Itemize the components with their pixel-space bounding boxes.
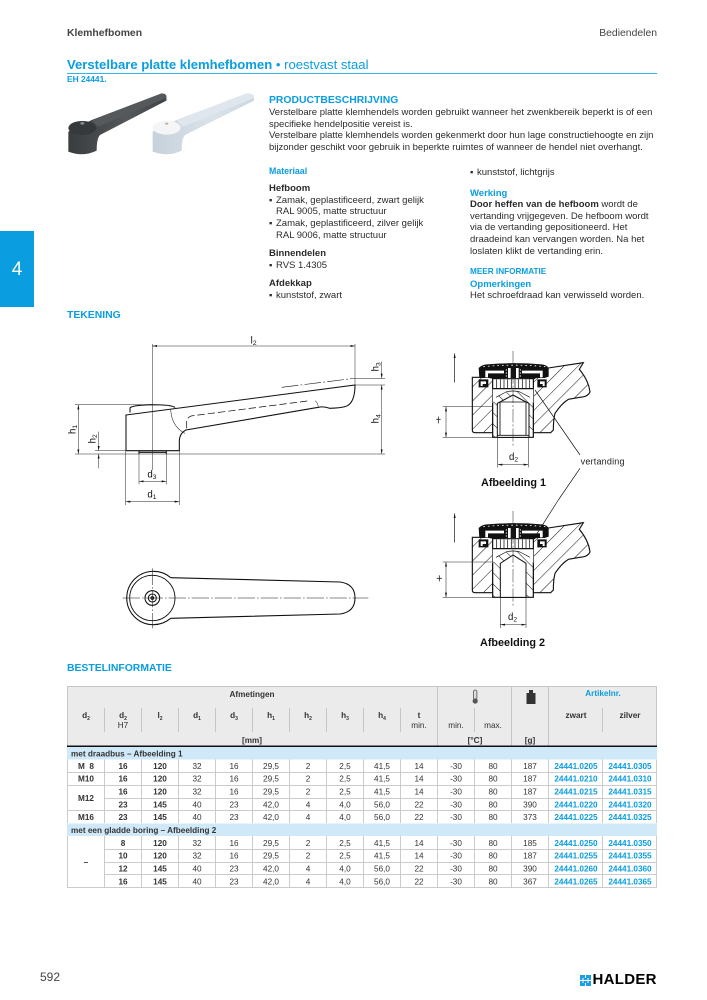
row: bore 12: 24441.0260 (554, 864, 598, 874)
row: bore 12: 80 (488, 864, 498, 874)
leader lines (535, 390, 580, 500)
section drawing: figure 2 (436, 500, 591, 649)
dimension labels: h (67, 429, 78, 434)
table header: h (304, 711, 309, 720)
cover cap colour: ▪ (470, 167, 473, 178)
row: bore 16: 56,0 (374, 877, 390, 886)
icon: light handle (153, 93, 254, 154)
inner parts material: RVS 1.4305 (276, 260, 327, 271)
lever material: ▪ (269, 218, 272, 229)
logo (580, 970, 657, 988)
running header right: Bediendelen (599, 28, 657, 38)
operation text: loslaten klikt de vertanding erin. (470, 246, 603, 257)
cover cap material (269, 278, 342, 301)
cover cap colour: kunststof, lichtgrijs (477, 167, 555, 178)
table header: [g] (525, 736, 535, 745)
row: M10: 2,5 (339, 775, 351, 784)
operation text: Door heffen van de hefboom wordt de (470, 199, 638, 210)
row: M8: 29,5 (263, 762, 279, 771)
inner parts material (269, 248, 327, 271)
row: M10 (78, 775, 652, 784)
row: M8 (78, 762, 652, 771)
smooth bore group label: – (84, 858, 89, 867)
row: M8: 41,5 (374, 762, 390, 771)
icon: weight (526, 690, 536, 704)
dimension labels: 1 (72, 425, 79, 429)
label: toothing: vertanding (581, 457, 625, 467)
table header: d (82, 711, 87, 720)
dimension labels: 4 (375, 414, 382, 418)
row: M12 d2 23: -30 (450, 800, 462, 809)
cover cap material: kunststof, zwart (276, 290, 342, 301)
leader line (535, 500, 558, 537)
row: M16: 23 (229, 813, 239, 822)
row: M12 d2 23: 4,0 (339, 800, 351, 809)
row: bore 12: 40 (192, 864, 202, 874)
article code: EH 24441. (67, 74, 107, 84)
table header: [°C] (468, 736, 483, 745)
top view of lever (123, 568, 368, 628)
row: M12 d2 23: 145 (153, 800, 167, 809)
figure 2 caption: Afbeelding 2 (480, 637, 545, 649)
dimension d2: 2 (513, 617, 517, 624)
threaded bore (497, 395, 529, 437)
table header: [mm] (242, 736, 262, 745)
section band: smooth bore: met een gladde boring – Afbeelding 2 (71, 826, 217, 835)
row: M16: 40 (192, 813, 202, 822)
row: bore 8: 16 (229, 839, 239, 848)
dimension labels: d (147, 489, 153, 500)
table header: zilver (620, 711, 641, 720)
row: M12 d2 23: 4 (306, 800, 311, 809)
row: M16: -30 (450, 813, 462, 822)
row: M16: 24441.0225 (554, 813, 598, 822)
heading: product description: PRODUCTBESCHRIJVING (269, 94, 398, 106)
lever material: ▪ (269, 195, 272, 206)
row: M12 d2 16: -30 (450, 788, 462, 796)
row: bore 10: 24441.0355 (608, 852, 652, 861)
table header: 2 (87, 716, 90, 722)
row: M10: 24441.0310 (608, 775, 652, 784)
row: bore 12: 23 (229, 864, 239, 874)
cover cap material: Afdekkap (269, 278, 312, 289)
row: M10: 29,5 (263, 775, 279, 784)
row: M10: 2 (306, 775, 311, 784)
logo wordmark: HALDER (592, 970, 657, 988)
centre line (512, 511, 514, 607)
row: bore 10: -30 (450, 852, 462, 861)
row: M16: 145 (153, 813, 167, 822)
row: M8: 32 (192, 762, 202, 771)
row: M16: 4 (306, 813, 311, 822)
section body (472, 363, 590, 437)
table header: max. (484, 721, 502, 730)
lever material: Zamak, geplastificeerd, zwart gelijk (276, 195, 424, 206)
row: bore 16: 4 (306, 877, 311, 886)
inner parts material: ▪ (269, 260, 272, 271)
row: M12 d2 23: 390 (523, 800, 537, 809)
row: M10: 120 (153, 775, 167, 784)
section body (472, 523, 590, 597)
row: M12 d2 16: 16 (229, 788, 239, 796)
dimensions of side view (75, 344, 385, 505)
dimension d2: d (509, 452, 514, 463)
centre line (512, 351, 514, 447)
row: M16: 80 (488, 813, 498, 822)
row: bore 12: 390 (523, 864, 537, 874)
row: bore 16: 40 (192, 877, 202, 886)
row: M16: 4,0 (339, 813, 351, 822)
row: M12 d2 23: 40 (192, 800, 202, 809)
row: bore 16: 23 (229, 877, 239, 886)
product description text: Verstelbare platte klemhendels worden gebruikt wanneer het zwenkbereik beperkt is of een (269, 107, 652, 118)
row: bore 12 (118, 864, 652, 874)
row: bore 8: 14 (414, 839, 424, 848)
row: M16: 373 (523, 813, 537, 822)
lever material: RAL 9005, matte structuur (276, 206, 387, 217)
dimension labels: 1 (153, 494, 157, 501)
row: M10: 187 (523, 775, 537, 784)
row: bore 8: 24441.0250 (554, 839, 598, 848)
heading: material: Materiaal (269, 166, 307, 176)
row: M12 d2 23: 23 (118, 800, 128, 809)
row: bore 10: 41,5 (374, 852, 390, 861)
heading: drawing: TEKENING (67, 310, 121, 321)
dimension labels: l (251, 335, 253, 346)
row: bore 8: 41,5 (374, 839, 390, 848)
row: M16: 24441.0325 (608, 813, 652, 822)
row: bore 12: 4,0 (339, 864, 351, 874)
lift arrow (454, 353, 456, 383)
row: bore 12: 42,0 (263, 864, 279, 874)
material column (269, 183, 424, 301)
title: Verstelbare platte klemhefbomen • roestvast staal (67, 57, 368, 72)
row: bore 8: 32 (192, 839, 202, 848)
row: bore 16: -30 (450, 877, 462, 886)
icon: thermometer (473, 690, 478, 704)
row: M10: 32 (192, 775, 202, 784)
dimension d2 (500, 597, 526, 628)
dimension d2: 2 (514, 457, 518, 464)
table header: 2 (124, 716, 127, 722)
table header: l (157, 711, 160, 720)
icon: dark handle (68, 93, 166, 154)
row: bore 16: 367 (523, 877, 537, 886)
row: M16: 22 (414, 813, 424, 822)
table header: t (418, 711, 421, 720)
lever material: Hefboom (269, 183, 310, 194)
row: M8: 2 (306, 762, 311, 771)
row: bore 10: 32 (192, 852, 202, 861)
inner parts material: Binnendelen (269, 248, 326, 259)
operation text: draadeind kan vervangen worden. Na het (470, 234, 644, 245)
dimension d2 (498, 437, 528, 467)
row: M10: 16 (229, 775, 239, 784)
operation text: vertanding vrijgegeven. De hefboom wordt (470, 211, 648, 222)
dimension labels: h (371, 366, 382, 371)
row: M8: 187 (523, 762, 537, 771)
table header: Afmetingen (229, 690, 275, 699)
row: bore 12: 56,0 (374, 864, 390, 874)
row: M8: 80 (488, 762, 498, 771)
dimension labels: h (371, 418, 382, 423)
chapter tab (0, 231, 34, 307)
row: M12 d2 16: 29,5 (263, 788, 279, 796)
row: M8: 2,5 (339, 762, 351, 771)
row: M8: 16 (229, 762, 239, 771)
operation text (470, 199, 648, 257)
row: M8: 16 (118, 762, 128, 771)
row: bore 8: 2 (306, 839, 311, 848)
lever material: Zamak, geplastificeerd, zilver gelijk (276, 218, 423, 229)
dimension labels: d (147, 469, 153, 480)
row: bore 8: 2,5 (339, 839, 351, 848)
dimension labels: 3 (153, 474, 157, 481)
table header: 1 (198, 716, 201, 722)
row: M12 label: M12 (78, 794, 94, 803)
row: M12 d2 16 (118, 788, 652, 796)
row: M12 d2 16: 32 (192, 788, 202, 796)
row: M12 d2 23: 80 (488, 800, 498, 809)
row: M12 d2 16: 24441.0315 (608, 788, 652, 796)
table header: d (230, 711, 235, 720)
row: bore 16: 22 (414, 877, 424, 886)
row: M12 d2 23: 23 (229, 800, 239, 809)
row: bore 12: -30 (450, 864, 462, 874)
row: bore 8: 8 (121, 839, 126, 848)
row: M12 d2 23 (118, 800, 652, 809)
row: bore 16: 145 (153, 877, 167, 886)
product description text: Verstelbare platte klemhendels worden gekenmerkt door hun lage constructiehoogte en zijn (269, 130, 653, 141)
table header: 4 (383, 716, 386, 722)
row: bore 10: 16 (229, 852, 239, 861)
section band: threaded bush (67, 747, 657, 760)
table header: 2 (160, 716, 163, 722)
side view of lever (126, 379, 355, 454)
more information heading: MEER INFORMATIE (470, 266, 546, 276)
row: M10: 41,5 (374, 775, 390, 784)
dimension labels: 3 (375, 362, 382, 366)
dimension labels: h (87, 438, 98, 443)
chapter tab: 4 (12, 259, 22, 280)
table header: 3 (235, 716, 238, 722)
row: M12 d2 16: 187 (523, 788, 537, 796)
row: M8: 24441.0205 (554, 762, 598, 771)
dimension t (436, 407, 493, 437)
row: M10: 16 (118, 775, 128, 784)
figure 1 caption: Afbeelding 1 (481, 477, 546, 489)
table grid (67, 759, 657, 888)
section drawing: figure 1 (436, 351, 625, 500)
row: M10: M10 (78, 775, 94, 784)
row: bore 16 (118, 877, 652, 886)
row: bore 10: 187 (523, 852, 537, 861)
row: bore 10: 120 (153, 852, 167, 861)
dimension t (437, 562, 493, 597)
row: M8: 14 (414, 762, 424, 771)
row: bore 10: 24441.0255 (554, 852, 598, 861)
row: bore 8: 80 (488, 839, 498, 848)
row: bore 16: 4,0 (339, 877, 351, 886)
plain bore (500, 555, 526, 597)
row: bore 12: 145 (153, 864, 167, 874)
table header: Artikelnr. (585, 689, 621, 698)
table header: d (119, 711, 124, 720)
table header: 2 (309, 716, 312, 722)
row: M10: 14 (414, 775, 424, 784)
table header: h (378, 711, 383, 720)
technical drawing: side view and top view (67, 335, 385, 628)
row: bore 16: 42,0 (263, 877, 279, 886)
row: M12 d2 16: 14 (414, 788, 424, 796)
table header: 3 (346, 716, 349, 722)
table header: min. (411, 721, 427, 730)
row: M8: M 8 (78, 762, 94, 771)
row: bore 8: 120 (153, 839, 167, 848)
row: M16: 23 (118, 813, 128, 822)
lift arrow (454, 513, 456, 543)
row: bore 16: 24441.0265 (554, 877, 598, 886)
row: bore 16: 80 (488, 877, 498, 886)
row: bore 10: 14 (414, 852, 424, 861)
table header: min. (448, 721, 464, 730)
operation heading: Werking (470, 188, 507, 199)
table header: 1 (272, 716, 275, 722)
row: M12 d2 16: 24441.0215 (554, 788, 598, 796)
row: bore 12: 24441.0360 (608, 864, 652, 874)
row: bore 8 (121, 839, 652, 848)
row: M10: 80 (488, 775, 498, 784)
dimension labels (67, 335, 382, 501)
page number: 592 (40, 970, 60, 984)
row: M12 d2 23: 42,0 (263, 800, 279, 809)
row: M16: M16 (78, 813, 94, 822)
row: bore 10: 29,5 (263, 852, 279, 861)
remarks heading: Opmerkingen (470, 279, 531, 290)
table header: zwart (566, 711, 587, 720)
row: bore 8: 29,5 (263, 839, 279, 848)
lever material (269, 183, 424, 241)
row: bore 10: 2 (306, 852, 311, 861)
product description text (269, 107, 653, 153)
icon: logo mark (580, 975, 591, 986)
row: bore 10: 10 (118, 852, 128, 861)
row: M8: 120 (153, 762, 167, 771)
product photo (68, 93, 254, 154)
section band: threaded bush: met draadbus – Afbeelding 1 (71, 749, 183, 758)
row: M12 d2 23: 24441.0320 (608, 800, 652, 809)
table header: d (193, 711, 198, 720)
operation text: via de vertanding gepositioneerd. Het (470, 222, 627, 233)
row: M12 d2 16: 41,5 (374, 788, 390, 796)
lever material: RAL 9006, matte structuur (276, 230, 387, 241)
cover cap material: ▪ (269, 290, 272, 301)
table header: H7 (118, 721, 129, 730)
row: M12 d2 16: 120 (153, 788, 167, 796)
row: M12 d2 16: 2,5 (339, 788, 351, 796)
row: bore 8: 185 (523, 839, 537, 848)
table header: h (267, 711, 272, 720)
section band: smooth bore (67, 824, 657, 836)
row: M12 d2 23: 56,0 (374, 800, 390, 809)
row: M10: -30 (450, 775, 462, 784)
product description text: bijzonder geschikt voor gebruik in beperkte ruimtes of wanneer de hendel niet overhangt. (269, 142, 643, 153)
heading: ordering information: BESTELINFORMATIE (67, 663, 172, 674)
running header left: Klemhefbomen (67, 28, 142, 38)
row: bore 12: 12 (118, 864, 128, 874)
row: M16 (78, 813, 652, 822)
row: bore 12: 22 (414, 864, 424, 874)
dimension d2: d (508, 612, 513, 623)
row: M12 d2 16: 2 (306, 788, 311, 796)
row: M16: 42,0 (263, 813, 279, 822)
row: M8: -30 (450, 762, 462, 771)
product description text: specifieke hendelpositie vereist is. (269, 119, 413, 130)
row: M10: 24441.0210 (554, 775, 598, 784)
dimension labels: 2 (253, 340, 257, 347)
table header: h (341, 711, 346, 720)
row: bore 16: 24441.0365 (608, 877, 652, 886)
dimension labels: 2 (92, 434, 99, 438)
row: bore 10 (118, 852, 652, 861)
row: M12 d2 23: 22 (414, 800, 424, 809)
row: bore 10: 80 (488, 852, 498, 861)
row: M12 d2 23: 24441.0220 (554, 800, 598, 809)
row: M16: 56,0 (374, 813, 390, 822)
row: M12 d2 16: 80 (488, 788, 498, 796)
row: M12 d2 16: 16 (118, 788, 128, 796)
table header (67, 686, 657, 747)
row: bore 16: 16 (118, 877, 128, 886)
row: bore 10: 2,5 (339, 852, 351, 861)
row: bore 12: 4 (306, 864, 311, 874)
remarks text: Het schroefdraad kan verwisseld worden. (470, 290, 644, 301)
row: bore 8: 24441.0350 (608, 839, 652, 848)
row: M8: 24441.0305 (608, 762, 652, 771)
row: bore 8: -30 (450, 839, 462, 848)
